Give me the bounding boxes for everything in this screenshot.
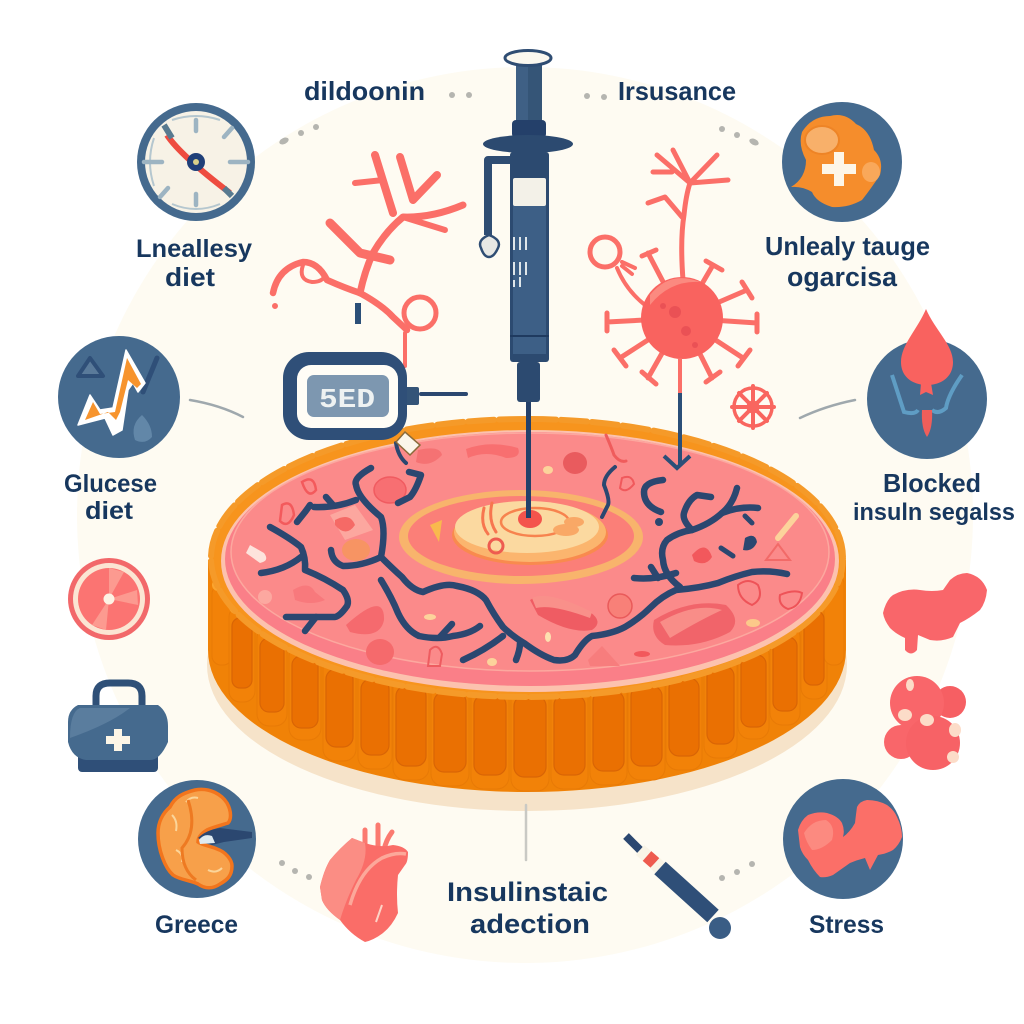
label: Unlealy tauge ogarcisa: ogarcisa bbox=[787, 262, 898, 292]
plunger cap bbox=[505, 50, 551, 66]
chart line fill bbox=[85, 358, 141, 420]
plunger bbox=[516, 62, 542, 124]
icon: citrus fruit bbox=[68, 558, 150, 640]
icon: spotted organ bbox=[884, 676, 966, 770]
tissue cells and debris bbox=[246, 435, 802, 666]
label: Unlealy tauge ogarcisa: Unlealy tauge bbox=[765, 231, 930, 261]
icon: coral organ bbox=[883, 573, 987, 654]
barrel graduations bbox=[514, 237, 526, 287]
connector lines bbox=[190, 400, 855, 860]
label: dildoonin: dildoonin bbox=[304, 76, 425, 106]
ring receptor bbox=[590, 237, 620, 267]
label: Blocked insuln segalss: insuln segalss bbox=[853, 499, 1015, 526]
barrel bbox=[510, 152, 549, 362]
probe line bbox=[664, 393, 690, 468]
blood drop bbox=[901, 309, 953, 385]
label: Lneallesy diet: diet bbox=[165, 262, 215, 292]
meter screen bbox=[307, 375, 389, 417]
icon: medical bag bbox=[68, 683, 168, 772]
gauge needle bbox=[167, 135, 230, 193]
icon: unhealthy organ circle bbox=[782, 102, 902, 222]
left branching nerve bbox=[272, 155, 463, 366]
needle bbox=[526, 402, 531, 518]
syringe side arm bbox=[488, 160, 512, 235]
label: Glucese diet: Glucese bbox=[64, 470, 157, 498]
virus cell bbox=[590, 150, 757, 468]
white cross bbox=[822, 152, 856, 186]
label: Insulinstaic adection: adection bbox=[470, 909, 590, 939]
small receptor icon bbox=[732, 386, 774, 428]
disc shadow bbox=[207, 519, 847, 811]
meter connector bbox=[405, 387, 419, 405]
label: Blocked insuln segalss bbox=[853, 468, 1015, 526]
icon: gauge bbox=[137, 103, 255, 221]
icon: blood drop circle bbox=[867, 309, 987, 459]
label: Lneallesy diet: Lneallesy bbox=[136, 235, 252, 263]
chart line outline bbox=[78, 350, 145, 435]
spikes bbox=[607, 250, 757, 384]
meter clip bbox=[396, 432, 420, 455]
pale rim band bbox=[221, 430, 839, 692]
pancreas probe bbox=[198, 828, 252, 845]
glucose meter bbox=[283, 352, 468, 455]
label: Unlealy tauge ogarcisa bbox=[765, 231, 930, 292]
label: Greece: Greece bbox=[155, 911, 238, 939]
dotted connectors bbox=[278, 92, 760, 881]
label: Glucese diet bbox=[64, 470, 157, 525]
icon: heart bbox=[320, 825, 408, 942]
virus stem bbox=[678, 358, 682, 393]
blood vessels bbox=[261, 443, 787, 660]
syringe arm tip bbox=[480, 235, 499, 257]
rib caps bbox=[212, 569, 844, 692]
ring stem bbox=[617, 262, 645, 305]
vessel dot bbox=[655, 518, 663, 526]
disc side wall bbox=[208, 560, 846, 792]
barrel label bbox=[513, 178, 546, 206]
syringe hub bbox=[517, 362, 540, 402]
icon: pancreas circle bbox=[138, 780, 256, 898]
label: Insulinstaic adection bbox=[447, 877, 608, 939]
pancreas tissue disc bbox=[208, 419, 846, 792]
icon: stress circle bbox=[783, 779, 903, 899]
label: Blocked insuln segalss: Blocked bbox=[883, 468, 981, 498]
label: Insulinstaic adection: Insulinstaic bbox=[447, 877, 608, 907]
disc rim bbox=[211, 419, 843, 697]
pancreas highlights bbox=[172, 798, 222, 872]
central islet bbox=[399, 490, 643, 584]
virus body bbox=[641, 277, 723, 359]
icon: insulin pen bbox=[626, 836, 731, 939]
flange bbox=[483, 135, 573, 153]
icon: glucose chart bbox=[58, 336, 180, 458]
tissue surface bbox=[225, 432, 835, 686]
nerve stub bbox=[355, 303, 361, 324]
meter reading: 5ED bbox=[319, 386, 375, 416]
syringe bbox=[480, 50, 573, 518]
top branching stem bbox=[648, 150, 728, 280]
label: Stress: Stress bbox=[809, 911, 884, 939]
label: Irsusance: Irsusance bbox=[618, 76, 736, 106]
rib inner panels bbox=[232, 611, 824, 777]
label: Glucese diet: diet bbox=[85, 497, 134, 525]
inner tissue surface bbox=[231, 433, 829, 671]
disc ribs bbox=[212, 575, 844, 791]
label: Lneallesy diet bbox=[136, 235, 252, 292]
meter body bbox=[283, 352, 407, 440]
